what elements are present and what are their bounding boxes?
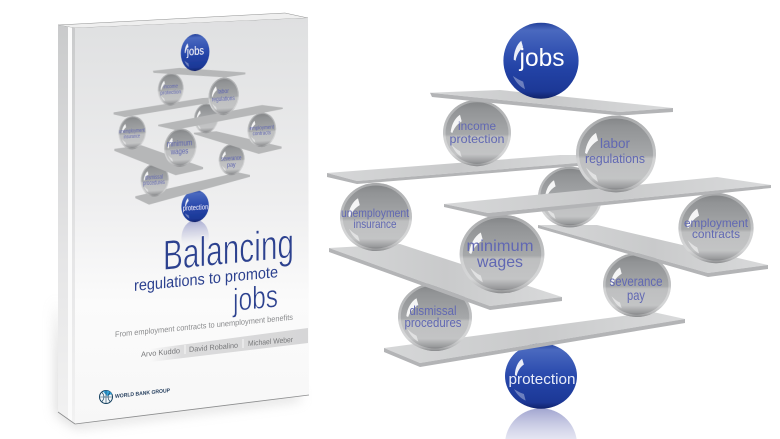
ball: unemployment insurance: unemployment bbox=[341, 206, 410, 220]
ball: dismissal procedures: dismissal bbox=[410, 303, 457, 318]
cover illustration: balancing balls: pay bbox=[227, 161, 236, 169]
ball: employment contracts bbox=[678, 193, 754, 263]
cover illustration: balancing balls: unemployment bbox=[119, 127, 145, 136]
cover title: Balancing: Balancing bbox=[163, 219, 294, 279]
cover title: regulations to promote: regulations to promote bbox=[134, 263, 278, 295]
ball: dismissal procedures: procedures bbox=[404, 315, 462, 330]
book front cover bbox=[75, 18, 309, 424]
ball: jobs: jobs bbox=[519, 44, 564, 72]
ball: employment contracts: contracts bbox=[692, 227, 740, 241]
cover illustration: balancing balls: severance bbox=[221, 154, 242, 163]
cover illustration: balancing balls: minimum bbox=[167, 140, 192, 149]
ball: back bbox=[538, 167, 602, 227]
ball: protection bbox=[505, 343, 577, 409]
cover illustration: balancing balls: contracts bbox=[253, 130, 271, 138]
author names: Michael Weber bbox=[248, 335, 293, 348]
ball: labor regulations: labor bbox=[600, 136, 630, 151]
cover illustration: balancing balls bbox=[114, 29, 283, 260]
author names: Arvo Kuddo bbox=[141, 346, 180, 359]
ball: employment contracts: employment bbox=[684, 216, 749, 230]
plank: top bbox=[430, 90, 673, 116]
author band bbox=[150, 328, 308, 362]
protection ball reflection bbox=[505, 408, 577, 439]
cover title: jobs: jobs bbox=[232, 278, 278, 318]
plank: middle left bbox=[327, 155, 590, 184]
logo wordmark: WORLD BANK GROUP bbox=[115, 388, 170, 400]
plank: bottom bbox=[384, 312, 685, 367]
cover illustration: balancing balls: jobs bbox=[186, 45, 205, 59]
ball: unemployment insurance bbox=[340, 183, 412, 251]
book shadow bbox=[56, 300, 300, 428]
cover illustration: balancing balls: protection bbox=[183, 204, 209, 213]
cover illustration: balancing balls: wages bbox=[170, 148, 189, 157]
icon: globe bbox=[100, 390, 112, 404]
book bbox=[56, 13, 309, 428]
World Bank Group logo bbox=[100, 388, 170, 404]
ball: income protection: income bbox=[458, 119, 496, 133]
ball: income protection bbox=[443, 100, 511, 166]
cover illustration: balancing balls: insurance bbox=[124, 133, 140, 141]
ball: dismissal procedures bbox=[398, 283, 472, 351]
cover illustration: balancing balls: protection bbox=[160, 89, 181, 97]
cover illustration: balancing balls: income bbox=[163, 83, 178, 91]
cover subtitle: From employment contracts to unemployment benefits bbox=[115, 313, 293, 339]
cover bottom edge bbox=[75, 395, 309, 424]
author names bbox=[141, 335, 293, 359]
ball: unemployment insurance: insurance bbox=[354, 217, 397, 231]
cover illustration: balancing balls: dismissal bbox=[145, 174, 163, 182]
cover illustration: balancing balls: regulations bbox=[212, 95, 235, 104]
ball: labor regulations: regulations bbox=[585, 151, 645, 166]
main illustration: balancing balls bbox=[327, 23, 771, 439]
cover illustration: balancing balls: employment bbox=[250, 124, 274, 132]
ball: income protection: protection bbox=[450, 132, 504, 146]
ball: severance pay bbox=[603, 253, 671, 317]
book spine bbox=[58, 25, 75, 424]
ball: minimum wages: minimum bbox=[466, 238, 534, 255]
cover illustration: balancing balls: labor bbox=[218, 88, 229, 96]
ball: minimum wages: wages bbox=[476, 254, 523, 271]
author names: David Robalino bbox=[189, 341, 238, 354]
ball: protection: protection bbox=[508, 371, 576, 388]
book top pages bbox=[58, 13, 308, 28]
plank: middle right bbox=[444, 177, 771, 217]
ball: minimum wages bbox=[460, 215, 544, 293]
ball: labor regulations bbox=[576, 116, 656, 192]
ball: severance pay: severance bbox=[610, 273, 663, 289]
plank: lower left bbox=[329, 244, 562, 310]
plank: lower right bbox=[538, 225, 768, 277]
cover illustration: balancing balls: procedures bbox=[143, 180, 165, 188]
ball: severance pay: pay bbox=[627, 287, 645, 303]
ball: jobs bbox=[503, 23, 579, 99]
